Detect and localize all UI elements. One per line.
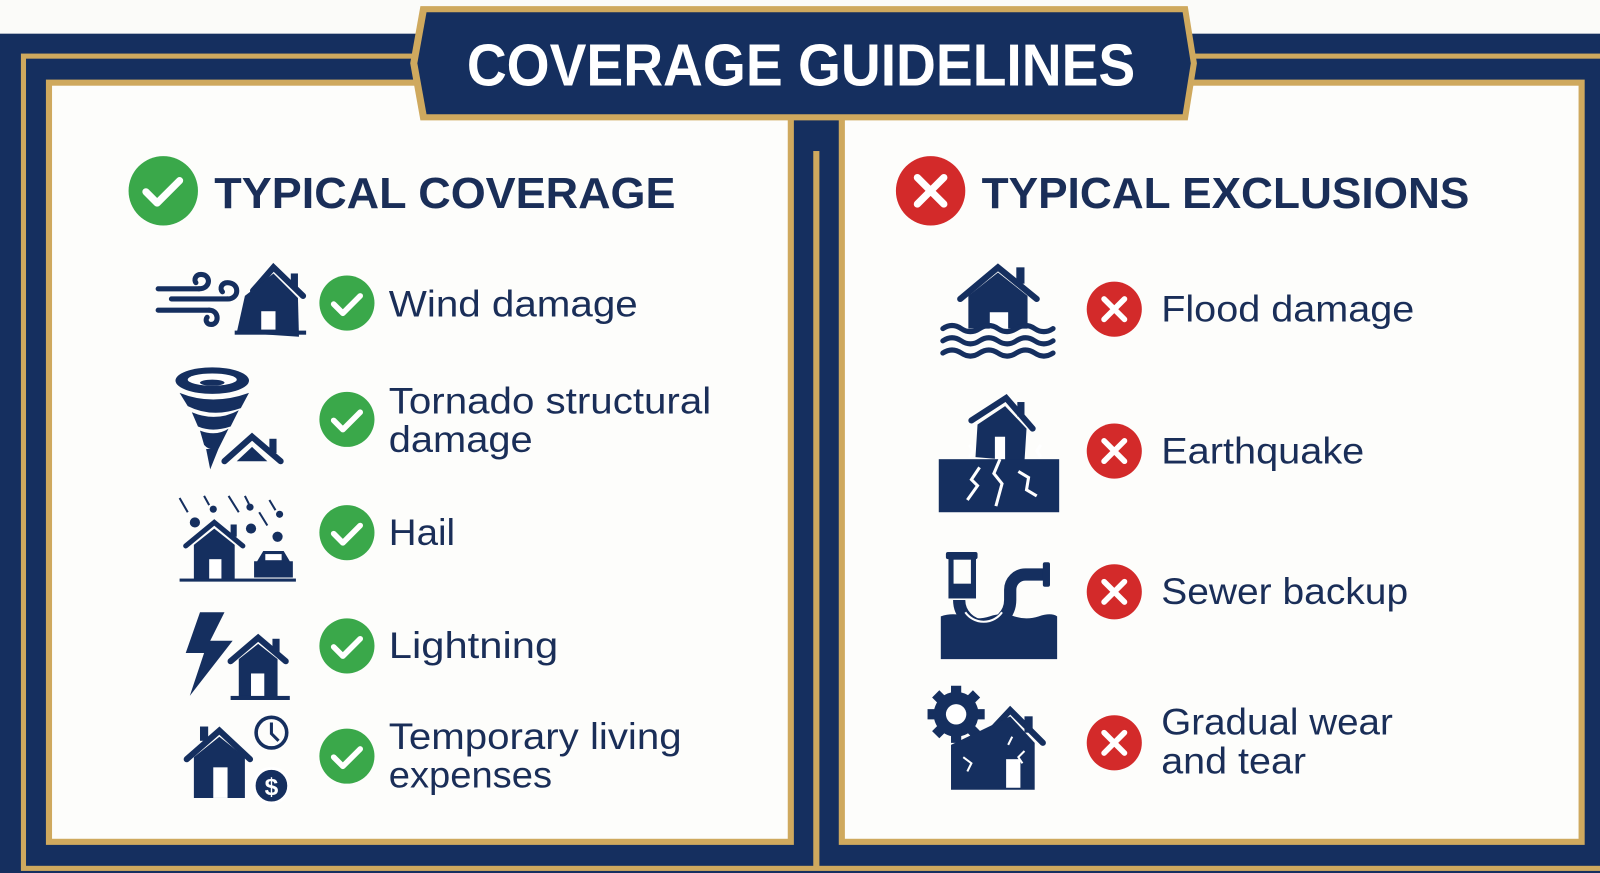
item: wind damage: Wind damage [389,283,638,324]
title banner: COVERAGE GUIDELINES [467,32,1135,99]
heading: typical coverage: TYPICAL COVERAGE [214,169,676,218]
item: tornado [176,367,711,469]
icon: wind and house [158,267,306,337]
icon: gear and damaged house [928,686,1043,790]
item: tornado: Tornado structural [389,380,711,421]
heading: typical coverage [129,156,676,226]
item: gradual wear and tear: and tear [1161,740,1306,781]
item: hail: Hail [389,512,455,553]
panel: typical coverage [129,156,711,803]
item: gradual wear and tear: Gradual wear [1161,702,1393,743]
icon: check [319,276,374,331]
panel: typical exclusions [896,156,1469,790]
item: earthquake [939,398,1364,512]
icon: lightning and house [186,612,290,700]
title banner [410,6,1197,120]
item: sewer backup [941,552,1408,659]
icon: tornado and roof [176,367,281,469]
item: temporary living: Temporary living [389,716,682,757]
item: wind damage [158,267,638,337]
icon: hail, house and car [180,496,296,582]
icon: house, clock and dollar: $ [265,774,279,801]
item: gradual wear and tear [928,686,1393,790]
item: lightning [186,612,558,700]
item: sewer backup: Sewer backup [1161,571,1408,612]
icon: earthquake [939,398,1059,512]
heading: typical exclusions [896,156,1469,226]
item: flood [943,267,1414,356]
item: temporary living: expenses [389,755,552,796]
icon: pipe and sewage [941,552,1057,659]
heading: typical exclusions: TYPICAL EXCLUSIONS [982,169,1469,218]
item: temporary living [187,716,682,803]
item: flood: Flood damage [1161,288,1414,329]
icon: flooded house [943,267,1053,356]
item: hail [180,496,455,582]
item: lightning: Lightning [389,625,558,666]
item: earthquake: Earthquake [1161,430,1364,471]
item: tornado: damage [389,419,533,460]
icon: house, clock and dollar [187,717,289,803]
